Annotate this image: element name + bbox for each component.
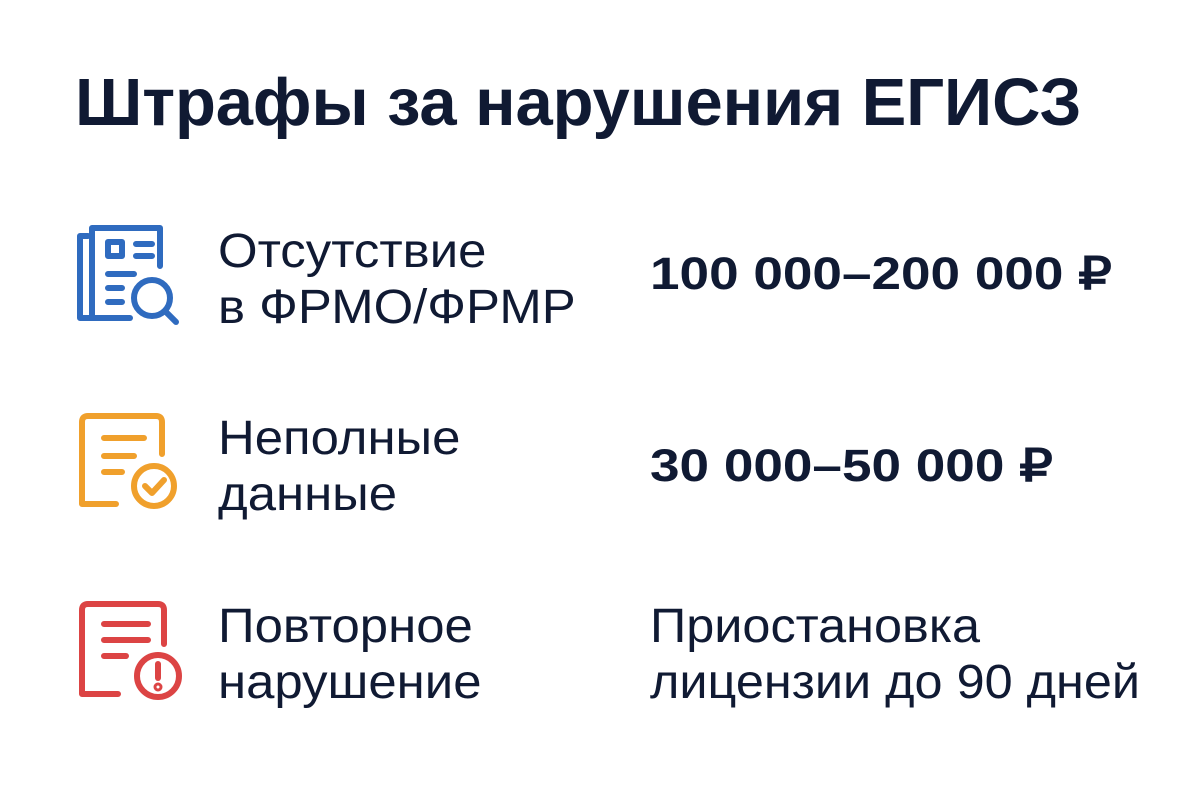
icon: document check (79, 413, 177, 509)
consequence (650, 600, 1140, 709)
amount 1: 100 000–200 000 ₽ (650, 248, 1112, 299)
title: Штрафы за нарушения ЕГИСЗ (75, 65, 1081, 140)
icon: document search (77, 225, 179, 325)
label: absence (218, 225, 576, 334)
label: absence: Отсутствие (218, 225, 486, 278)
label: incomplete: данные (218, 468, 397, 521)
consequence: Приостановка (650, 600, 980, 653)
consequence: лицензии до 90 дней (650, 656, 1140, 709)
label: incomplete (218, 412, 460, 521)
label: absence: в ФРМО/ФРМР (218, 281, 576, 334)
amount 2: 30 000–50 000 ₽ (650, 440, 1053, 491)
label: repeat (218, 600, 481, 709)
icon: document warning (79, 601, 182, 700)
label: repeat: нарушение (218, 656, 481, 709)
label: repeat: Повторное (218, 600, 473, 653)
label: incomplete: Неполные (218, 412, 460, 465)
